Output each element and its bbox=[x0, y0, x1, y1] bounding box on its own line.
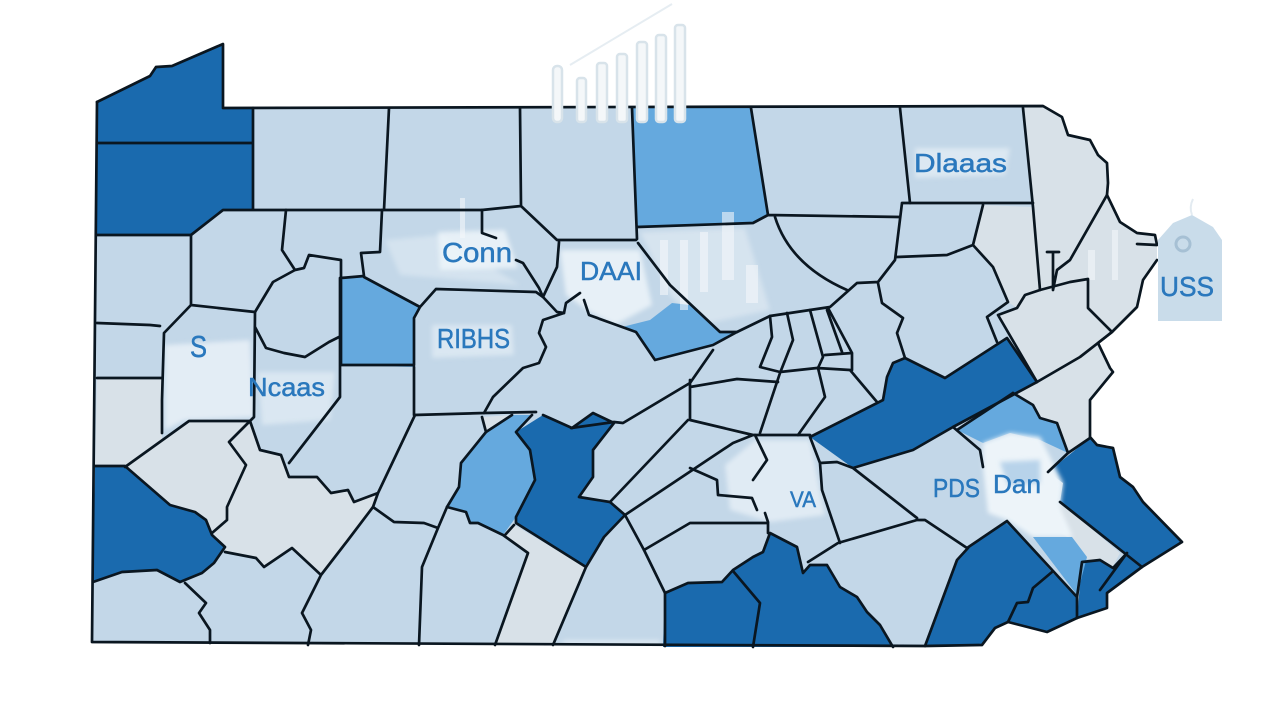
light grey counties bbox=[95, 106, 1157, 645]
label: RIBHS: RIBHS bbox=[437, 323, 510, 354]
washed-out label patches bbox=[165, 148, 1073, 645]
map: county choropleth bbox=[92, 44, 1182, 647]
faded vertical bars bbox=[460, 198, 1118, 310]
medium counties bbox=[341, 108, 1068, 535]
label: Dlaaas: Dlaaas bbox=[914, 148, 1007, 178]
label: Dan: Dan bbox=[993, 469, 1041, 499]
label: Ncaas: Ncaas bbox=[248, 372, 325, 402]
label: Conn: Conn bbox=[442, 237, 512, 268]
medium counties over wash bbox=[622, 303, 1087, 595]
label: VA: VA bbox=[790, 487, 816, 512]
state base bbox=[92, 44, 1182, 646]
dark counties bbox=[93, 44, 1182, 647]
county borders bbox=[92, 44, 1182, 647]
label: S: S bbox=[190, 329, 207, 364]
inner blue smear bbox=[1000, 460, 1040, 485]
tag label: USS bbox=[1160, 271, 1214, 302]
icon: price tag with USS bbox=[1158, 199, 1222, 321]
label: PDS: PDS bbox=[933, 473, 980, 503]
icon: bar chart watermark bbox=[553, 4, 685, 122]
label: DAAI: DAAI bbox=[580, 256, 642, 286]
county labels bbox=[190, 148, 1041, 512]
